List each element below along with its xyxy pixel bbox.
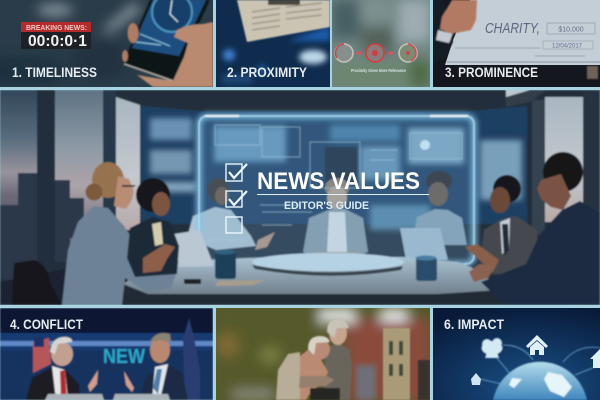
title panel: EDITOR'S GUIDE [284,200,369,212]
label: 3. prominence: 3. PROMINENCE [445,65,538,80]
label: 6. impact: 6. IMPACT [444,317,505,332]
panel: 2. proximity [216,0,330,87]
wall of news screens [141,106,527,230]
panel: 4. conflict [0,308,213,400]
table with disc and mugs [123,253,520,305]
icon: small orange detail [587,66,598,79]
person: man behind hologram [187,178,275,250]
person: left debater [26,337,98,400]
icon: cloud network [482,338,502,358]
hologram panel glow [199,116,474,264]
laptop left [174,230,214,267]
caption: small text: Proximity Gives More Relevance [351,68,407,73]
icon: checklist [226,164,247,233]
icon: charity cheque: 12/04/2017 [552,44,583,50]
panel: 3. prominence [433,0,600,87]
icon: flags [33,318,200,400]
icon: house right [590,349,600,368]
person: woman right behind hologram [400,171,467,260]
title panel [257,172,429,209]
icon: breaking news timer: 00:0:0·1 [28,33,87,50]
icon: breaking news timer [21,22,91,50]
person: man in navy suit foreground [469,152,600,305]
icon: newspaper [237,0,330,42]
panel: human interest couple [215,308,430,400]
panel: 6. impact [433,308,600,400]
person: woman centre in blazer [303,178,368,258]
mug: left [214,250,236,279]
title panel: NEWS VALUES [257,168,420,195]
icon: podiums [45,394,170,400]
mug: right [416,256,437,281]
right windows [504,90,584,236]
icon: charity cheque [445,0,600,65]
icon: linked red rings [335,44,417,62]
person: right debater [124,333,188,400]
icon: charity cheque: CHARITY, [485,20,540,37]
panel: newsroom hero [0,90,600,305]
person: man in grey suit [465,175,538,274]
icon: hand holding smartphone [122,0,213,87]
icon: hand holding cheque [433,0,477,62]
label: 2. proximity: 2. PROXIMITY [227,65,307,80]
buildings [356,328,430,400]
text: NEW screen: NEW [103,346,145,368]
icon: globe with network [480,345,600,400]
icon: charity cheque: $10,000 [558,26,584,34]
label: 1. timeliness: 1. TIMELINESS [12,65,97,80]
person: woman far left [12,162,176,305]
person: woman curly hair [127,178,179,277]
panel: human interest photo [332,0,430,87]
left windows [0,90,140,305]
items on table [184,279,265,286]
icon: breaking news timer: BREAKING NEWS: [26,23,87,32]
icon: small house [471,373,481,385]
panel: 1. timeliness [0,0,213,88]
label: 4. conflict: 4. CONFLICT [10,317,84,332]
person: elderly couple embracing [276,319,352,400]
icon: house [526,335,548,355]
